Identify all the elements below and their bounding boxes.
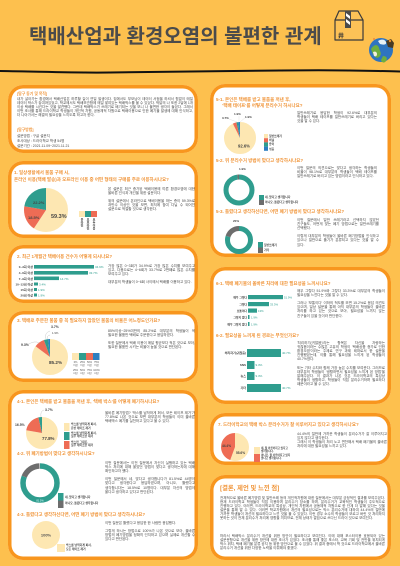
legend swatches xyxy=(58,493,64,508)
legend: unnecessary items: 미만 xyxy=(94,371,99,375)
panel: question 4 xyxy=(8,390,198,560)
legend text: 일반쓰레기 xyxy=(264,242,277,246)
text: question 5-3 analysis: 이렇게 대부분의 학생들이 올바른 폐기방법을 인식하고 있으나 일반으로 폴기가 분류되고 있다는 것을 알 수 있다. xyxy=(297,234,379,247)
bar chart: necessity felt: 매우 그렇지 않다 xyxy=(227,322,247,326)
heading: question 4-1: 4-1. 본인은 택배를 받고 물품을 꺼낸 후, '택배 박스'를 어떻게 폐기하시나요? xyxy=(17,399,159,404)
bar chart: monthly deliveries: 1.9% xyxy=(38,288,45,292)
legend text xyxy=(261,447,290,461)
pie chart: box disposal: 16.5% xyxy=(15,423,25,427)
pie chart: purchase type: 59.3% xyxy=(51,214,67,220)
bar chart: route to awareness: 9.3% xyxy=(256,363,263,367)
bar chart: route to awareness: 처리하기(귀찮음) xyxy=(225,350,246,355)
text: method: 설문방법 : 구글 설문지 xyxy=(17,134,50,138)
bar chart: route to awareness: 9.3% xyxy=(256,374,263,378)
pie chart: purchase type xyxy=(24,188,68,232)
bar chart: necessity felt: 그렇다 xyxy=(239,302,247,306)
text: question 6-1 analysis: 매우 그렇다 51.9%와 그렇다 33.3%로 대부분의 학생들이 필요성을 느낀다는 것을 알 수 있다. xyxy=(297,289,385,297)
bar chart: necessity felt: 33.3% xyxy=(270,302,278,306)
heading: question 1: 1. 일상생활에서 물품 구매 시, xyxy=(14,170,70,175)
heading: conclusion: [결론, 제언 및 느낀 점] xyxy=(220,485,279,492)
legend text: 네, 맞다고 생각합니다 xyxy=(265,195,290,199)
text: question 7 analysis: 그래서 이 학생들이 처리 노고 편찬해서 택배 폐기물의 올바른 처리에 대한 필요성을 느끼고 있다. xyxy=(297,440,387,448)
legend: unnecessary items: 25% xyxy=(73,369,79,372)
pie chart: recycling quality xyxy=(221,433,249,461)
pie chart: tape disposal xyxy=(222,112,256,154)
legend text: 박스를 납작하게 펴서, xyxy=(71,422,96,426)
text: question 4-3 analysis xyxy=(105,521,195,541)
legend: unnecessary items: 미만 xyxy=(73,371,78,375)
bar chart: necessity felt: 13% xyxy=(258,309,264,313)
heading: question 3: 3. 택배로 주문한 물품 중 꼭 필요하지 않았던 물품의 비율은 어느정도인가요? xyxy=(17,318,160,323)
heading: question 1 xyxy=(14,170,169,182)
legend: unnecessary items: 50% xyxy=(80,369,86,372)
bar chart: monthly deliveries: 15회 이상 xyxy=(21,287,33,292)
text: question 2 analysis xyxy=(108,264,195,284)
panel: question 5 xyxy=(210,84,391,257)
legend: recycling quality xyxy=(254,447,294,462)
bar chart: monthly deliveries: 3.4% xyxy=(39,282,46,286)
legend: unnecessary items: 25% xyxy=(80,361,86,364)
icon: parcel box: 井 xyxy=(338,32,344,40)
legend: unnecessary items: 100% xyxy=(93,369,100,372)
legend: purchase type: 온라인 xyxy=(80,217,84,227)
text: question 5-1 analysis: 일반쓰레기로 응답한 학생이 92.6%로 대부분의 학생들이 택배 테이프를 일반쓰레기로 버리고 있다는 것을 알 수 있다. xyxy=(297,111,377,123)
text: question 7 analysis: 44.4%의 절반에 가까운 학생들이 분리수거가 잘 이루어지고 있지 않다고 생각한다. xyxy=(297,432,387,440)
legend: unnecessary items: 50% xyxy=(87,361,93,364)
heading: question 4-2: 4-2. 위 폐기방법이 맞다고 생각하시나요? xyxy=(17,451,95,456)
bar chart: monthly deliveries: 1.9% xyxy=(38,294,45,298)
legend text: 아니오, 잘 이루어지고 있지 xyxy=(261,454,290,457)
legend text: 아니오, 틀렸다고 생각합니다 xyxy=(265,200,298,204)
text: question 6-2 analysis: '처리하기(귀찮음)'라는 항목은 자신을 자랑하는 귀찮음이라는 수많은 고유의 학생이 '택배상품 증가로 인한 환경오염'이라는 주제로 연구 과제 테마로서 한 설문을 진행했었는데, 이를 통해 필요성을 느끼게 된 학생들이 40.7%였다. xyxy=(297,341,385,361)
legend text xyxy=(71,422,96,447)
text: method xyxy=(17,134,70,148)
bar chart: necessity felt: 매우 그렇다 xyxy=(233,296,247,300)
heading: question 5-3: 5-3. 틀렸다고 생각하신다면, 어떤 폐기 방법이 맞다고 생각하시나요? xyxy=(216,209,344,214)
legend text: 아니오, 틀렸다고 생각합니다 xyxy=(65,501,98,505)
bar chart: monthly deliveries: 0~3회 이상 xyxy=(19,264,33,269)
legend: correct method xyxy=(57,543,92,552)
legend: tape disposal xyxy=(264,134,282,151)
text: question 3 analysis: 또한 질문에서 택배 이용이 매달 평균보다 적은 것으로 보아, 필요한 물품만 시키는 비율이 높을 것으로 판단된다. xyxy=(108,341,195,349)
text: conclusion paragraph 2: 따라서 택배박스 분리수거 개선을 위한 방안이 필요하다고 보여진다. 이에 대해 포스터이용 호응되어 있는 설문문항으로 개선을 위한 방안에 대한 조사가 있었다. 조사를 통해 좋은 포스터, 교육 기회 및 전반을 위치되게 박스 위치, 택배 폐기물 분류 공지 등 위한 방안으로 볼 수 있었다. 위 결과 중에서 학 것으로 드라이학교에서 올바른 분리수거 개선을 위한 다양한 노력을 이뤄해야 좋겠다. xyxy=(220,534,385,550)
bar chart: route to awareness: 40.7% xyxy=(282,386,291,390)
legend: unnecessary items: 0% xyxy=(74,361,78,364)
donut chart: tape correct method: 20% xyxy=(233,219,239,223)
text: question 3 analysis: 85%이상~25%미만의 85.2%로 대부분의 학생들이 꼭 필요한 물품만 택배로 주문한다고 응답하였다. xyxy=(108,329,195,337)
donut chart: method correct xyxy=(20,463,60,503)
bar chart: monthly deliveries: 34.9% xyxy=(95,265,104,269)
text: question 4-2 analysis: 이번 질문에서 네, 맞다고 생각합니다가 81.5%로 44명이 맞다고 생각한다고 응답하였으며, 아니오, 틀렸다고 생각합니다는 18.5%로 10명이다. 대부분 자신의 방법이 옳다고 생각하고 있다고 판단된다. xyxy=(105,477,195,494)
legend swatches xyxy=(254,447,260,462)
text: question 4-2 analysis: 이번 질문에서는 이전 질문에서 자신이 실행하고 있는 택배 박스 처리에 대해 옳았던 방법이 맞다고 생각하는지에 대해 확인하고자 했다. xyxy=(105,461,195,473)
text: question 1 analysis: 위의 설문에서 온라인으로 택배이용을 하는 층이 59.3%로 과반수 이상인 것을 보면, 최저에 참여 다닐 수 되어진 설문으로 적절할 것으로 생각한다. xyxy=(108,199,195,211)
legend: unnecessary items: 75% xyxy=(94,361,100,364)
text: question 4-3 analysis: 이번 질문은 틀렸다고 응답한 한 사람만 응답했다. xyxy=(105,521,176,525)
text: question 4-2 analysis xyxy=(105,461,195,494)
legend text: 섞음 xyxy=(269,147,274,151)
legend: unnecessary items: 미만 xyxy=(87,371,92,375)
text: question 5-3 analysis: 이번 질문에서 일반 쓰레기라고 선택하지 않았던 친구들도, 어떤게 맞는 폐기 방법으로는 일반쓰레기를 선택했다. xyxy=(297,218,379,230)
pie chart: box disposal: 77.8% xyxy=(42,436,55,441)
text: method: 설문기간 : 2021.11.09~2021.11.21 xyxy=(17,144,69,148)
text: question 6-1 analysis: 그러나 '보통이다' 이하의 척도를 모면 15.2%로 응답 의견도 있으며, 일상 설문을 통해 아직 대부분의 학생들이 올바른 처리를 하고 있는 것으로 보아, 필요성을 느끼지 않는 친구들이 있을 것이라 판단한다. xyxy=(297,301,385,318)
legend text: 네, 맞다고 생각합니다 xyxy=(65,495,90,499)
panel: question 7 xyxy=(210,413,391,465)
pie chart: tape disposal: 1.9% xyxy=(234,112,241,116)
heading: question 5-2: 5-2. 위 분리수거 방법이 맞다고 생각하시나요? xyxy=(216,158,303,163)
text: motivation: 내가 살아가는 환경에서 택배산업은 하루할 길이 연일 발생이다. 집에서도 부모님이 데이터 서점을 하셔서 힘없이 매일 데이터 박스가 놓여져있었고, 학교에서도 택배보관함에 매일 쌓여있는 택배박스를 볼 수 있었다. 박달의 나 또한 2달에 1개 이상 택배를 시킨다는 것을 발견했다. 그런데 택배박스가 쓰레기로 배기되는 것을 보니 나 불편한 생각이 들었다. 그래서 이번 조사를 통해 드라이학교 학생들이 개인적 차원, 공동체적 차원으로 택배이용으로 인한 폐기물 발생에 대해 인식하고, 더 나아가서는 해결의 필요성을 느끼도록 하고자 한다. xyxy=(17,97,193,117)
legend text: 네, 잘 이루어지고 있다고 xyxy=(261,447,288,450)
donut chart: tape correct method xyxy=(225,219,253,254)
bar chart: monthly deliveries: 14.7% xyxy=(60,277,69,281)
text: question 6-2 analysis: 또는 기타 수치와 함께 가장 높은 수치를 보여준다. 그러므로 대부분의 학생들이 '생활하면서 필요성을 느끼게 된 방법'을 말해주었다. 이 결과가 나온 것은 드라이학교의 특성상 학생들이 생활하고, 학생들이 직접 분리수거하며 필요하다 때문이라고 볼 수 있다. xyxy=(297,366,385,386)
bar chart: monthly deliveries: 33.7% xyxy=(89,271,98,275)
heading: question 2: 2. 최근 1개월간 택배이용 건수가 어떻게 되시나요? xyxy=(17,254,112,259)
text: question 4-1 analysis: 올바른 폐기방법? '박스를 납작하게 펴서, 모든 테이프 제거'가 77.8%로 나온 것으로 보면 대부분의 학생들이 이미 올바른 택배박스 폐기를 실천하고 있다고 볼 수 있다. xyxy=(105,411,195,423)
text: question 1 analysis xyxy=(108,187,195,211)
heading: question 5-1: 5-1. 본인은 택배를 받고 물품을 꺼낸 후, xyxy=(216,97,290,102)
panel: question 1 xyxy=(8,161,198,238)
bar chart: monthly deliveries: 10~12회 이상 xyxy=(15,282,33,286)
pie chart: box disposal: 3.7% xyxy=(45,408,53,412)
pie chart: box disposal xyxy=(15,408,58,449)
bar chart: necessity felt: 51.9% xyxy=(284,296,292,300)
legend text xyxy=(264,242,277,252)
heading: question 6-1: 6-1. 택배 폐기물의 올바른 처리에 대한 필요성을 느끼시나요? xyxy=(216,281,330,286)
legend text: 일반쓰레기 xyxy=(269,134,282,138)
heading: question 1: 온라인 이용(택배 발송)과 오프라인 이용 중 어떤 형태의 구매를 주로 이용하시나요? xyxy=(14,176,169,182)
legend: tape method correct xyxy=(259,195,298,205)
text: conclusion paragraph 1: 전체적으로 올바른 폐기방법 및 일반쓰레 등의 개인적차원에 대한 질문에서는 대부분 긍정적인 결과를 보여주었다. 현재 드라이학교 학생들이 직접 이용하며 분리수거 장소를 하며, 분리수거가 교육적인 학생들이 주도적으로 진행하고 있다. 이러면, 드라이학교의 특성상, 개인적 차원에서 공동체적 차원으로 한 단계 더 말해 있다는 것을 설문을 통해 알 수 있다. 이러면 학교차원에서 개선의 필요성으로는 박스 분리수거에 대하여 44.4%의 절반에 가까운 학생들이 개선의 필요하다고 느낀 것을 볼 수 있었다. 이런 경우 소수의 학생들이 모르고 버린 것 처리하지 못하는 것이 전체 분리수거 처리에 영향을 끼치므로, 전체 상태가 깔끔으로 쓰다닌 드라이 것으로 보여진다. xyxy=(220,496,385,520)
panel: question 6 xyxy=(210,267,391,404)
legend: unnecessary items: 이상 xyxy=(80,363,85,367)
pie chart: purchase type: 22.2% xyxy=(33,200,45,205)
text: question 5-3 analysis xyxy=(297,218,379,247)
legend text: 일부 테이프만 제거 xyxy=(71,434,93,438)
legend: unnecessary items: 이상 xyxy=(94,363,99,367)
donut chart: method correct: 81.5% xyxy=(36,498,44,502)
legend text: 생각합니다. xyxy=(261,450,274,453)
text: question 3 analysis xyxy=(108,328,195,349)
bar chart: monthly deliveries: 7~9회 이상 xyxy=(19,276,33,281)
heading: method: [탐구방법] xyxy=(17,128,34,132)
divider line xyxy=(0,69,400,74)
legend text: 박스만 그대로, xyxy=(71,440,88,444)
legend swatches xyxy=(264,134,268,151)
pie chart: unnecessary items xyxy=(21,325,68,375)
legend: tape correct method xyxy=(258,242,277,253)
text: question 7 analysis xyxy=(297,432,387,448)
legend swatches xyxy=(64,423,70,449)
panel: question 3 xyxy=(8,311,198,382)
legend: unnecessary items: 75% xyxy=(87,369,93,372)
bar chart: monthly deliveries: 20회 이상 xyxy=(21,292,33,298)
bar chart: necessity felt: 보통이다 xyxy=(237,309,247,313)
pie chart: recycling quality: 44.4% xyxy=(222,444,231,448)
text: method: 조사대상 : 드라이학교 학생 54명 xyxy=(17,139,64,143)
pie chart: correct method xyxy=(32,521,60,549)
pie chart: unnecessary items: 3.7% xyxy=(51,325,59,329)
text: question 1 analysis: 본 설문은 최근 증가된 택배이용에 따른 환경오염에 대한 올바른 인식과 개선을 위한 설문이다. xyxy=(108,187,195,195)
text: question 2 analysis: 가장 많은 0~3회가 34.9%로 가장 많은 수치를 보여주고 있고, 다음으로는 4~6회가 33.7%로 2번째로 많은 수치를 보여주고 있다. xyxy=(108,264,195,276)
pie chart: tape disposal: 1.9% xyxy=(245,115,252,119)
bar chart: necessity felt: 1.9% xyxy=(251,316,258,320)
pie chart: purchase type: 18.5% xyxy=(28,215,40,220)
bar chart: route to awareness: 뉴스 xyxy=(240,373,246,378)
legend text: 종이 xyxy=(269,142,274,146)
legend: unnecessary items: 미만 xyxy=(80,371,85,375)
legend swatches xyxy=(258,242,263,253)
bar chart: necessity felt: 1.9% xyxy=(251,322,258,326)
legend swatches xyxy=(259,195,264,205)
pie chart: unnecessary items: 9.3% xyxy=(21,343,29,347)
legend swatch xyxy=(57,544,65,552)
legend text xyxy=(65,495,98,505)
legend text: 박스를 납작하게 펴서, xyxy=(66,543,92,547)
legend: unnecessary items xyxy=(72,353,100,375)
legend text xyxy=(66,543,92,551)
legend: box disposal xyxy=(64,422,96,449)
text: question 6-2 analysis xyxy=(297,341,385,386)
bar chart: necessity felt: 그렇지 않다 xyxy=(233,316,247,320)
bar chart: route to awareness: 40.7% xyxy=(282,351,291,355)
heading: question 5-1 xyxy=(216,96,303,108)
pie chart: unnecessary items: 85.2% xyxy=(49,360,62,365)
donut chart: tape method correct xyxy=(224,167,254,206)
legend: unnecessary items: 이상 xyxy=(73,363,78,367)
pie chart: correct method: 100% xyxy=(41,532,52,538)
legend: purchase type: 모두이용 xyxy=(92,218,96,231)
text: question 5-2 analysis: 이번 질문의 의견으로는 맞다고 생각하는 학생들의 비율이 98.1%로 대부분의 학생들이 택배 테이프를 일반쓰레기로 버리고 있는 방법이라고 인식하고 있다. xyxy=(297,166,377,178)
legend: method correct xyxy=(58,493,98,508)
heading: question 5-1: '택배 테이프'를 어떻게 분리수거 하시나요? xyxy=(222,103,303,108)
panel: motivation and method xyxy=(8,85,198,153)
icon: parcel box xyxy=(334,10,364,41)
bar chart: route to awareness xyxy=(216,347,306,394)
pie chart: unnecessary items: 1.9% xyxy=(52,331,59,335)
legend: purchase type: 오프라인 xyxy=(86,218,90,230)
pie chart: recycling quality: 55.6% xyxy=(236,451,245,455)
pie chart: tape disposal: 92.6% xyxy=(238,144,250,148)
panel: question 2 xyxy=(8,245,198,303)
heading: question 7: 7. 드라이학교의 택배 박스 분리수거가 잘 이루어지고 있다고 생각하시나요? xyxy=(218,422,359,427)
heading: motivation: [탐구 동기 및 목적] xyxy=(17,92,47,96)
bar chart: necessity felt xyxy=(216,293,304,327)
text: question 2 analysis: 대부분의 학생들이 0~6회 사이에서 택배를 이용하고 있다. xyxy=(108,280,192,284)
legend: purchase type xyxy=(79,211,97,231)
text: question 6-1 analysis xyxy=(297,289,385,318)
legend text xyxy=(269,134,282,151)
icon: earth xyxy=(369,38,394,62)
text: question 4-3 analysis: 그렇게 하시는 방법으로 100%가 나온 것으로 보아, 올바른 방법의 폐기방법을 정확히 인지하고 있으며 실제로 개선할 수 있다고 판단된다. xyxy=(105,529,195,541)
bar chart: route to awareness: SNS xyxy=(240,363,246,367)
legend: unnecessary items: 이상 xyxy=(87,363,92,367)
bar chart: monthly deliveries xyxy=(15,264,104,298)
donut chart: tape method correct: 1.9% xyxy=(239,167,246,171)
legend text: 운반 테이프 제거 xyxy=(71,426,91,430)
legend text: 일부 테이프만 제거 xyxy=(71,443,93,447)
legend text xyxy=(265,195,298,204)
panel: conclusion xyxy=(210,475,391,560)
legend text: 박스를 납작하게 펴서, xyxy=(71,431,96,435)
legend text: 않다고 생각합니다. xyxy=(261,457,282,460)
pie chart: tape disposal: 3.7% xyxy=(222,116,229,120)
bar chart: monthly deliveries: 4~6회 이상 xyxy=(19,270,33,275)
heading: question 4-3: 4-3. 틀렸다고 생각하신다면, 어떤 폐기 방법이 맞다고 생각하시나요? xyxy=(17,512,145,517)
bar chart: route to awareness: 기타 xyxy=(240,385,246,390)
heading: question 6-2: 6-2. 필요성을 느끼게 된 경로는 무엇인가요? xyxy=(216,333,299,338)
legend text: 모든 테이프 제거 xyxy=(66,547,86,551)
title: 택배산업과 환경오염의 불편한 관계 xyxy=(29,26,322,48)
legend text: 기타 xyxy=(264,248,269,252)
legend text: 비닐 xyxy=(269,138,274,142)
